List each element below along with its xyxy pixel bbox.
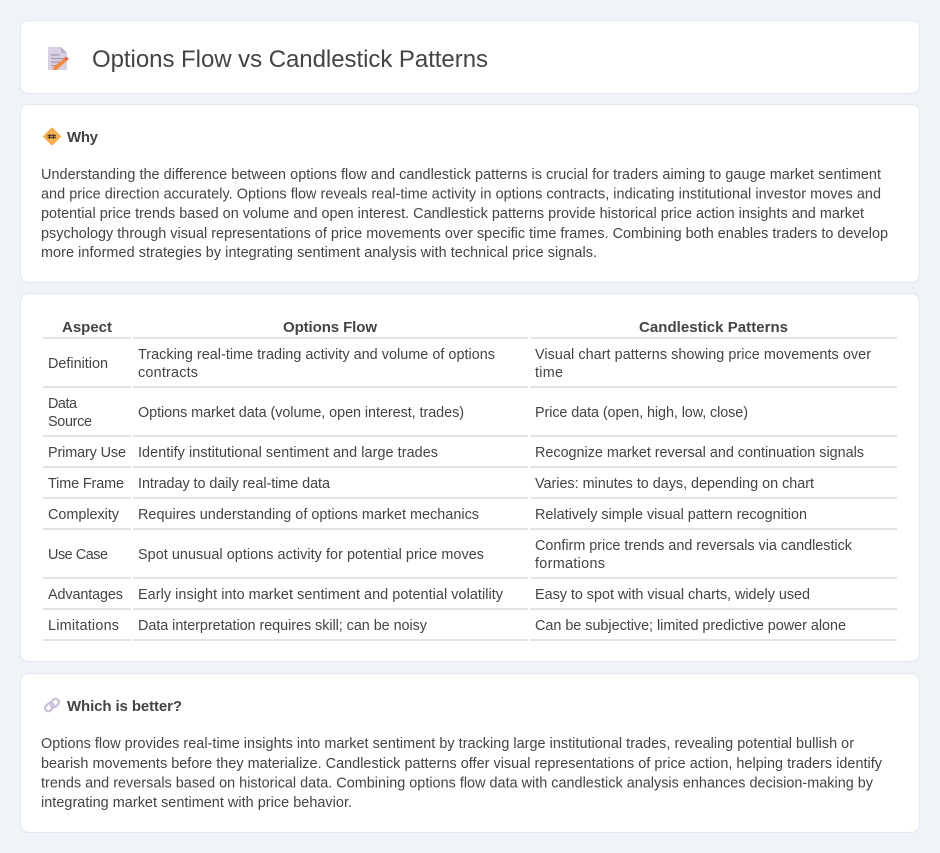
text block: which is better paragraph: bearish movements before they materialize. Candlestick patterns offer visual representations of price action, helping traders identify	[41, 756, 883, 772]
heading: why: Why	[67, 129, 99, 146]
icon: warning diamond	[44, 128, 60, 145]
row: data source: Price data (open, high, low, close)	[535, 405, 748, 421]
row: time frame: Intraday to daily real-time data	[138, 476, 330, 492]
row: primary use: Recognize market reversal and continuation signals	[535, 445, 864, 461]
row: definition	[48, 347, 871, 381]
row: use case	[48, 538, 853, 572]
row: advantages	[48, 587, 810, 603]
text block: which is better paragraph: Options flow provides real-time insights into market sentiment by tracking large institutional trades, revealing potential bullish or	[41, 736, 854, 752]
row: use case: Spot unusual options activity for potential price moves	[138, 547, 484, 563]
row: advantages: Advantages	[48, 587, 123, 603]
text block: why paragraph: potential price trends based on volume and open interest. Candlestick patterns provide historical price action insights and market	[41, 206, 864, 222]
table header row: Aspect	[62, 319, 112, 336]
row: primary use: Primary Use	[48, 445, 126, 461]
row: data source	[48, 396, 748, 430]
row: complexity: Relatively simple visual pattern recognition	[535, 507, 807, 523]
row: data source: Source	[48, 414, 92, 430]
panel: title header	[20, 20, 920, 94]
text block: which is better paragraph: integrating market sentiment with price behavior.	[41, 795, 352, 811]
text block: which is better paragraph: trends and reversals based on historical data. Combining options flow data with candlestick analysis enhances decision-making by	[41, 776, 874, 792]
row: use case: Confirm price trends and reversals via candlestick	[535, 538, 853, 554]
row: primary use: Identify institutional sentiment and large trades	[138, 445, 438, 461]
heading: which is better: Which is better?	[67, 698, 182, 715]
panel: which is better	[20, 674, 920, 832]
row: advantages: Early insight into market sentiment and potential volatility	[138, 587, 504, 603]
icon: document with pencil	[48, 47, 69, 70]
row: data source: Data	[48, 396, 77, 412]
row: limitations: Data interpretation requires skill; can be noisy	[138, 618, 428, 634]
panel: comparison table	[20, 294, 920, 662]
table header row	[62, 319, 788, 336]
row: use case: formations	[535, 556, 605, 572]
text block: why paragraph: more informed strategies by integrating sentiment analysis with technical price signals.	[41, 245, 597, 261]
text block: why paragraph	[41, 167, 888, 261]
row: definition: Tracking real-time trading activity and volume of options	[138, 347, 495, 363]
table header row: Options Flow	[283, 319, 377, 336]
row: time frame	[48, 476, 814, 492]
row: definition: Visual chart patterns showing price movements over	[535, 347, 871, 363]
row: definition: Definition	[48, 356, 108, 372]
text block: which is better paragraph	[41, 736, 883, 811]
row: definition: time	[535, 365, 563, 381]
row: definition: contracts	[138, 365, 198, 381]
panel: why	[20, 104, 920, 282]
row: advantages: Easy to spot with visual charts, widely used	[535, 587, 810, 603]
row: limitations	[48, 618, 846, 634]
row: time frame: Varies: minutes to days, depending on chart	[535, 476, 814, 492]
row: time frame: Time Frame	[48, 476, 124, 492]
row: limitations: Limitations	[48, 618, 119, 634]
row: data source: Options market data (volume, open interest, trades)	[138, 405, 464, 421]
table header row: Candlestick Patterns	[639, 319, 788, 336]
text block: why paragraph: Understanding the difference between options flow and candlestick patterns is crucial for traders aiming to gauge market sentiment	[41, 167, 881, 183]
title: Options Flow vs Candlestick Patterns	[92, 46, 488, 73]
row: complexity	[48, 507, 807, 523]
row: limitations: Can be subjective; limited predictive power alone	[535, 618, 846, 634]
row: complexity: Requires understanding of options market mechanics	[138, 507, 479, 523]
row: use case: Use Case	[48, 547, 108, 563]
icon: chain link	[44, 697, 60, 713]
text block: why paragraph: psychology through visual representations of price movements over specific time frames. Combining both enables traders to develop	[41, 226, 888, 242]
text block: why paragraph: and price direction accurately. Options flow reveals real-time activity in options contracts, indicating institutional investor moves and	[41, 186, 881, 202]
row: complexity: Complexity	[48, 507, 120, 523]
row: primary use	[48, 445, 864, 461]
